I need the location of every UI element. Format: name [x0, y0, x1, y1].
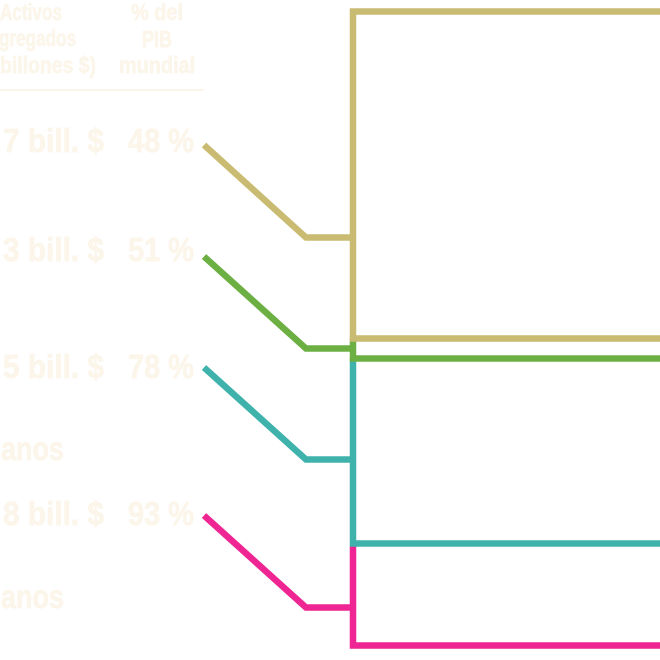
row 1 values: [3, 122, 194, 159]
panel outline: teal tier: [204, 358, 660, 544]
row 4 values: 93 %: [128, 495, 194, 532]
row 2 values: [3, 231, 194, 268]
row 1 values: 7 bill. $: [3, 122, 104, 159]
row 4 label: anos: [1, 578, 64, 615]
row 4 values: 8 bill. $: [3, 495, 104, 532]
row 2 values: 3 bill. $: [3, 231, 104, 268]
table header: GDP column: PIB: [142, 26, 172, 52]
row 3 label: anos: [1, 430, 64, 467]
connector: green: [204, 256, 353, 348]
connector: pink: [204, 516, 353, 608]
panel outline: green tier: [204, 256, 660, 358]
row 3 values: [3, 348, 194, 385]
header rule: [0, 89, 204, 91]
row 1 values: 48 %: [128, 122, 194, 159]
table header: GDP column: mundial: [119, 52, 195, 78]
row 3 values: 78 %: [128, 348, 194, 385]
row 2 values: 51 %: [128, 231, 194, 268]
connector: teal: [204, 368, 353, 460]
table header: GDP column: [119, 0, 195, 78]
row 3 values: 5 bill. $: [3, 348, 104, 385]
panel outline: gold tier: [204, 12, 660, 338]
panel outline: pink tier: [204, 516, 660, 646]
table header: assets column: gregados: [0, 25, 76, 51]
connector: gold: [204, 145, 353, 238]
table header: assets column: [0, 0, 96, 78]
table header: assets column: billones $): [0, 52, 96, 78]
row 4 values: [3, 495, 194, 532]
